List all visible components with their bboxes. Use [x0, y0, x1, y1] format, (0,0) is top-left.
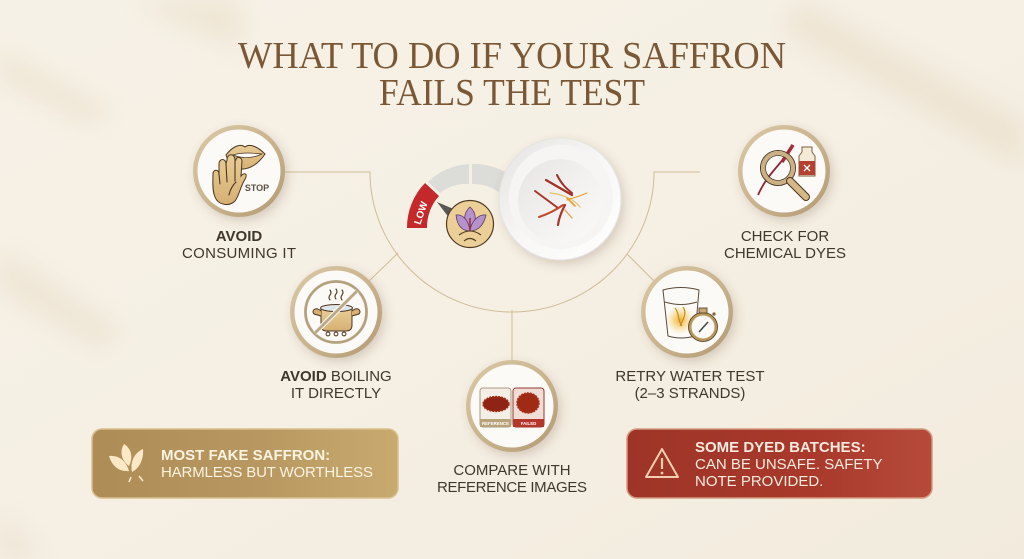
step: avoid consuming it — [182, 125, 296, 262]
gauge gray segments — [428, 164, 505, 193]
icon: warning triangle — [646, 449, 678, 477]
label: AVOID — [216, 228, 262, 245]
gauge — [407, 164, 505, 248]
callout: some dyed batches — [627, 429, 932, 498]
icon: glass and stopwatch — [641, 266, 733, 358]
bowl with saffron strands — [499, 138, 621, 260]
step: check for chemical dyes — [724, 125, 846, 262]
callout text: NOTE PROVIDED. — [695, 473, 823, 490]
callout text: SOME DYED BATCHES: — [695, 439, 866, 456]
callout text: CAN BE UNSAFE. SAFETY — [695, 456, 883, 473]
connector lines — [285, 172, 700, 364]
icon: broken saffron leaves — [109, 444, 143, 482]
label: AVOID BOILING — [280, 368, 392, 385]
icon: hand and lips stop: STOP — [245, 183, 269, 193]
step: retry water test — [615, 266, 765, 402]
label: RETRY WATER TEST — [615, 368, 765, 385]
label: CONSUMING IT — [182, 245, 296, 262]
step: avoid boiling it directly — [280, 266, 392, 402]
step: compare with reference images — [437, 360, 587, 496]
label: (2–3 STRANDS) — [635, 385, 745, 402]
callout text: MOST FAKE SAFFRON: — [161, 447, 330, 464]
gauge low segment: LOW — [413, 200, 431, 226]
gauge needle — [437, 202, 456, 219]
label: CHECK FOR — [741, 228, 829, 245]
icon: magnifier and dye bottle — [738, 125, 830, 217]
icon: reference and failed samples: FAILED — [521, 421, 536, 426]
icon: reference and failed samples: REFERENCE — [482, 421, 509, 426]
label: CHEMICAL DYES — [724, 245, 846, 262]
label: REFERENCE IMAGES — [437, 479, 587, 496]
label: IT DIRECTLY — [291, 385, 381, 402]
callout: most fake saffron — [92, 429, 398, 498]
title: WHAT TO DO IF YOUR SAFFRON — [238, 35, 786, 77]
label: COMPARE WITH — [453, 462, 571, 479]
sad saffron flower badge — [446, 200, 494, 248]
icon: reference and failed samples — [466, 360, 558, 452]
icon: crossed-out boiling pot — [290, 266, 382, 358]
title — [238, 35, 786, 114]
title: FAILS THE TEST — [379, 72, 645, 114]
callout text: HARMLESS BUT WORTHLESS — [161, 464, 373, 481]
